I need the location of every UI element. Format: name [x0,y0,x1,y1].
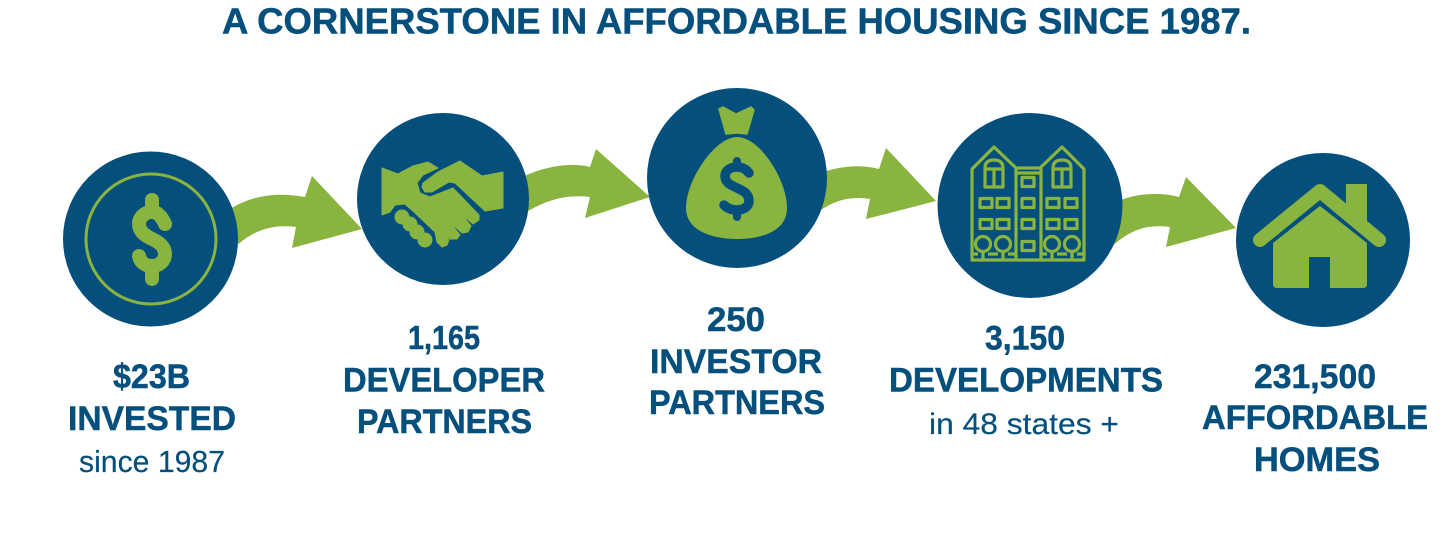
stat: developments: 3,150 [985,320,1065,358]
stat: affordable homes: 231,500 [1254,358,1376,396]
circle icon: money bag [647,88,827,268]
stat: invested: $23B [113,358,190,396]
arrow: invested to developer partners [225,176,362,250]
stat: developer partners: 1,165 [408,319,480,356]
title: A CORNERSTONE IN AFFORDABLE HOUSING SINCE 1987. [222,0,1251,42]
stat: investor partners: INVESTOR [650,343,822,381]
circle icon: handshake [357,113,529,285]
stat: invested [68,358,236,479]
arrow: developer partners to investor partners [520,149,650,218]
stat: affordable homes: HOMES [1254,441,1380,479]
stat: developer partners: PARTNERS [357,403,532,441]
stat: developments [889,320,1163,441]
stat: developer partners: DEVELOPER [343,362,545,400]
arrow: investor partners to developments [818,148,936,219]
circle icon: dollar coin [63,152,238,326]
arrow: developments to homes [1110,177,1236,248]
stat: developer partners [343,319,545,441]
stat: investor partners [649,301,825,422]
circle icon: apartment buildings [938,113,1122,298]
circle icon: house [1236,153,1410,327]
stat: affordable homes: AFFORDABLE [1202,399,1428,437]
stat: investor partners: 250 [707,301,765,339]
stat: invested: INVESTED [68,400,236,438]
stat: developments: DEVELOPMENTS [889,362,1163,400]
stat: investor partners: PARTNERS [649,384,825,422]
stat: invested: since 1987 [79,444,225,479]
stat: developments: in 48 states + [929,408,1119,441]
stat: affordable homes [1202,358,1428,479]
